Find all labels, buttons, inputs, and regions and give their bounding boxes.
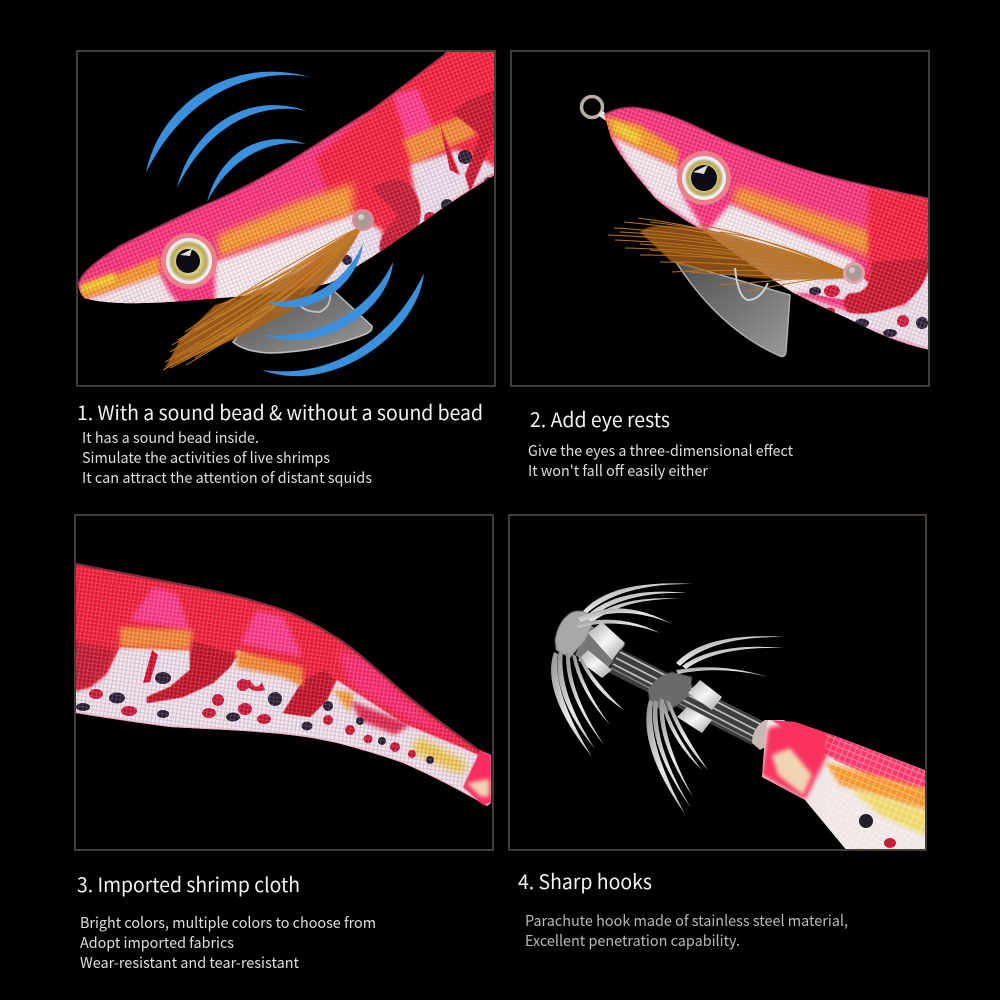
text block 2: [528, 404, 793, 481]
eye: [161, 233, 217, 289]
body text 1: Simulate the activities of live shrimps: [82, 447, 330, 468]
heading 1: 1. With a sound bead & without a sound bead: [77, 397, 483, 426]
sinker weight: [676, 262, 790, 356]
icon: sound waves: [146, 72, 424, 376]
bottom hooks: [646, 698, 708, 814]
line ring: [582, 96, 610, 120]
right hooks: [676, 636, 784, 677]
body text 3: [80, 912, 376, 973]
heading 4: 4. Sharp hooks: [518, 866, 652, 895]
text block 4: [518, 866, 848, 951]
lower hub: [648, 672, 692, 712]
body text 4: Parachute hook made of stainless steel material,: [525, 910, 848, 931]
upper hooks: [576, 583, 693, 633]
body text 2: [528, 440, 793, 481]
body text 3: Adopt imported fabrics: [80, 932, 234, 953]
heading 3: 3. Imported shrimp cloth: [77, 869, 300, 898]
feather: [163, 226, 362, 370]
left hooks: [551, 650, 624, 757]
panel 2: eye rests: [511, 51, 935, 386]
body text 1: [82, 427, 372, 488]
sound bead: [352, 209, 374, 231]
frame: [77, 51, 495, 386]
feather: [608, 218, 852, 300]
panel 1: sound bead: [70, 45, 500, 386]
body text 4: [525, 910, 848, 951]
text block 3: [77, 869, 376, 973]
bead: [843, 262, 865, 284]
panel 4: sharp hooks: [509, 515, 935, 855]
frame: [509, 515, 926, 850]
body spots: [76, 672, 434, 764]
body text 4: Excellent penetration capability.: [525, 930, 740, 951]
body spots: [809, 285, 928, 337]
body text 2: Give the eyes a three-dimensional effect: [528, 440, 793, 461]
clear cap: [752, 720, 785, 750]
sinker weight: [233, 290, 372, 353]
lure body tail: [762, 720, 925, 849]
panel 3: shrimp cloth: [70, 515, 495, 850]
body text 3: Wear-resistant and tear-resistant: [80, 952, 299, 973]
lure body: [70, 555, 495, 810]
body spots: [342, 150, 494, 266]
hook stem: [575, 625, 765, 745]
heading 2: 2. Add eye rests: [530, 404, 670, 433]
frame: [511, 51, 929, 386]
lure body: [600, 100, 935, 360]
body text 1: It can attract the attention of distant squids: [82, 467, 372, 488]
tail tip: [463, 751, 491, 805]
upper hub: [555, 611, 595, 658]
lure body: [70, 45, 500, 310]
text block 1: [77, 397, 483, 488]
frame: [75, 515, 493, 850]
collars: [578, 622, 722, 733]
body text 1: It has a sound bead inside.: [82, 427, 259, 448]
body spots: [859, 814, 896, 848]
eye: [677, 151, 731, 205]
body text 2: It won't fall off easily either: [528, 460, 708, 481]
body text 3: Bright colors, multiple colors to choose from: [80, 912, 376, 933]
